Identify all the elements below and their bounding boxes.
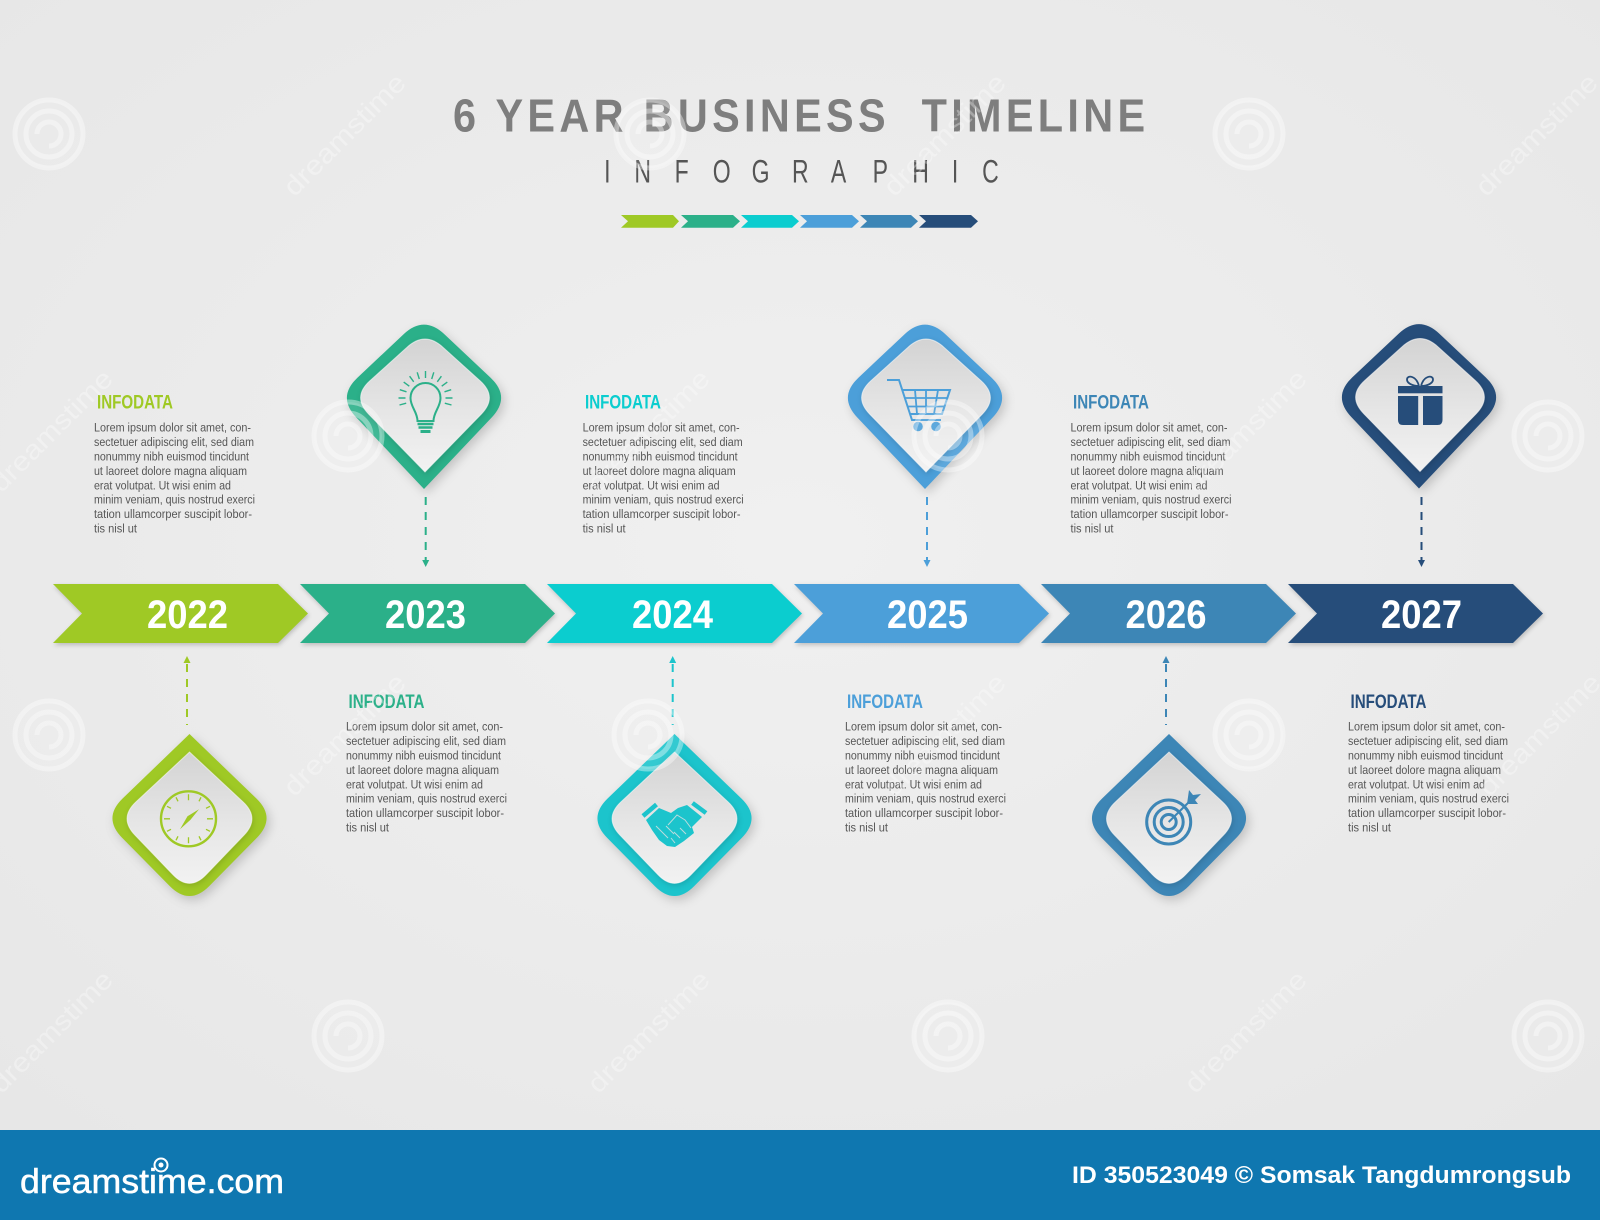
heading 2027: INFODATA bbox=[1350, 692, 1427, 713]
body 2027: sectetuer adipiscing elit, sed diam bbox=[1348, 734, 1508, 748]
body 2027: tation ullamcorper suscipit lobor- bbox=[1348, 806, 1506, 820]
subtitle: INFOGRAPHIC bbox=[604, 154, 999, 189]
body 2022: minim veniam, quis nostrud exerci bbox=[94, 493, 255, 507]
icon: light bulb bbox=[398, 371, 452, 432]
heading 2022: INFODATA bbox=[97, 392, 173, 414]
body 2023: ut laoreet dolore magna aliquam bbox=[346, 763, 499, 777]
body 2023 bbox=[346, 720, 507, 834]
body 2025 bbox=[845, 720, 1006, 834]
body 2024: tation ullamcorper suscipit lobor- bbox=[583, 507, 741, 521]
chevron 2023: 2023 bbox=[385, 593, 466, 637]
body 2026: sectetuer adipiscing elit, sed diam bbox=[1070, 435, 1230, 449]
body 2024: Lorem ipsum dolor sit amet, con- bbox=[583, 421, 740, 435]
footer credit: ID 350523049 © Somsak Tangdumrongsub bbox=[1072, 1162, 1571, 1189]
body 2022: nonummy nibh euismod tincidunt bbox=[94, 450, 249, 464]
text block 2022 bbox=[94, 392, 255, 536]
body 2024: ut laoreet dolore magna aliquam bbox=[583, 464, 736, 478]
chevron 2026: 2026 bbox=[1126, 593, 1206, 637]
icon: gift box bbox=[1398, 377, 1442, 425]
arrow 2024 bbox=[669, 656, 676, 725]
body 2025: sectetuer adipiscing elit, sed diam bbox=[845, 734, 1005, 748]
chevron 2027 bbox=[1288, 584, 1543, 643]
body 2024: erat volutpat. Ut wisi enim ad bbox=[583, 478, 720, 492]
body 2025: minim veniam, quis nostrud exerci bbox=[845, 792, 1006, 806]
body 2026: Lorem ipsum dolor sit amet, con- bbox=[1070, 421, 1228, 435]
diamond 2024 with handshake bbox=[597, 734, 752, 896]
body 2025: nonummy nibh euismod tincidunt bbox=[845, 749, 1000, 763]
chevron 2024: 2024 bbox=[632, 593, 714, 637]
body 2023: minim veniam, quis nostrud exerci bbox=[346, 792, 507, 806]
diamond 2025 with cart bbox=[848, 325, 1002, 489]
title: 6 YEAR BUSINESS TIMELINE bbox=[453, 91, 1145, 142]
body 2024: minim veniam, quis nostrud exerci bbox=[583, 493, 744, 507]
body 2024: nonummy nibh euismod tincidunt bbox=[583, 450, 738, 464]
diamond 2027 with gift bbox=[1342, 324, 1496, 488]
body 2022: Lorem ipsum dolor sit amet, con- bbox=[94, 421, 251, 435]
watermarks: dreamstime bbox=[581, 363, 716, 498]
body 2023: erat volutpat. Ut wisi enim ad bbox=[346, 777, 483, 791]
watermarks: dreamstime bbox=[1178, 363, 1313, 498]
icon: compass bbox=[161, 791, 216, 846]
watermarks: dreamstime bbox=[277, 67, 412, 202]
body 2023: nonummy nibh euismod tincidunt bbox=[346, 749, 501, 763]
watermarks: dreamstime bbox=[277, 667, 412, 802]
body 2027: erat volutpat. Ut wisi enim ad bbox=[1348, 777, 1485, 791]
title arrow strip bbox=[621, 215, 978, 228]
arrow 2026 bbox=[1162, 656, 1170, 725]
body 2023: Lorem ipsum dolor sit amet, con- bbox=[346, 720, 503, 734]
chevron 2025 bbox=[794, 584, 1049, 643]
body 2023: sectetuer adipiscing elit, sed diam bbox=[346, 734, 506, 748]
body 2027: Lorem ipsum dolor sit amet, con- bbox=[1348, 720, 1505, 734]
chevron 2024 bbox=[547, 584, 802, 643]
body 2022: tis nisl ut bbox=[94, 522, 137, 536]
body 2026: nonummy nibh euismod tincidunt bbox=[1070, 450, 1226, 464]
chevron 2023 bbox=[300, 584, 555, 643]
heading 2024: INFODATA bbox=[585, 392, 661, 414]
watermarks: dreamstime bbox=[877, 67, 1012, 202]
heading 2025: INFODATA bbox=[847, 692, 923, 713]
body 2025: Lorem ipsum dolor sit amet, con- bbox=[845, 720, 1002, 734]
timeline ribbon bbox=[53, 584, 1543, 643]
chevron 2026 bbox=[1041, 584, 1296, 643]
heading 2026: INFODATA bbox=[1073, 392, 1149, 414]
icon: handshake bbox=[643, 803, 706, 847]
heading 2023: INFODATA bbox=[348, 692, 425, 713]
body 2027: ut laoreet dolore magna aliquam bbox=[1348, 763, 1501, 777]
body 2024 bbox=[583, 421, 744, 536]
icon: target bbox=[1147, 790, 1201, 844]
text block 2025 bbox=[845, 692, 1006, 834]
text block 2024 bbox=[583, 392, 744, 536]
body 2026: minim veniam, quis nostrud exerci bbox=[1070, 493, 1232, 507]
body 2025: ut laoreet dolore magna aliquam bbox=[845, 763, 998, 777]
diamond 2023 with bulb bbox=[347, 325, 501, 489]
body 2023: tis nisl ut bbox=[346, 821, 389, 835]
body 2027: tis nisl ut bbox=[1348, 821, 1391, 835]
body 2025: tation ullamcorper suscipit lobor- bbox=[845, 806, 1003, 820]
body 2027: nonummy nibh euismod tincidunt bbox=[1348, 749, 1503, 763]
body 2022: sectetuer adipiscing elit, sed diam bbox=[94, 435, 254, 449]
body 2024: sectetuer adipiscing elit, sed diam bbox=[583, 435, 743, 449]
body 2022 bbox=[94, 421, 255, 536]
body 2022: erat volutpat. Ut wisi enim ad bbox=[94, 478, 231, 492]
watermarks: dreamstime bbox=[1178, 964, 1313, 1099]
footer banner bbox=[0, 1130, 1600, 1220]
body 2022: ut laoreet dolore magna aliquam bbox=[94, 464, 247, 478]
arrow 2027 bbox=[1418, 497, 1425, 567]
body 2024: tis nisl ut bbox=[583, 522, 626, 536]
diamond 2022 with compass bbox=[112, 734, 267, 896]
watermarks: dreamstime bbox=[1472, 667, 1600, 802]
body 2026: ut laoreet dolore magna aliquam bbox=[1070, 464, 1224, 478]
body 2026: tis nisl ut bbox=[1070, 522, 1114, 536]
text block 2027 bbox=[1348, 692, 1509, 834]
body 2027 bbox=[1348, 720, 1509, 834]
arrow 2023 bbox=[422, 497, 429, 567]
body 2022: tation ullamcorper suscipit lobor- bbox=[94, 507, 252, 521]
arrow 2022 bbox=[184, 656, 190, 725]
body 2025: erat volutpat. Ut wisi enim ad bbox=[845, 777, 982, 791]
arrow 2025 bbox=[924, 497, 930, 567]
watermarks: dreamstime bbox=[581, 964, 716, 1099]
icon: shopping cart bbox=[887, 380, 950, 430]
body 2026 bbox=[1070, 421, 1232, 536]
body 2023: tation ullamcorper suscipit lobor- bbox=[346, 806, 504, 820]
chevron 2022 bbox=[53, 584, 308, 643]
watermarks: dreamstime bbox=[877, 667, 1012, 802]
chevron 2027: 2027 bbox=[1381, 593, 1462, 637]
chevron 2022: 2022 bbox=[147, 593, 228, 637]
body 2027: minim veniam, quis nostrud exerci bbox=[1348, 792, 1509, 806]
footer logo: dreamstime.com bbox=[20, 1163, 284, 1201]
diamond 2026 with target bbox=[1092, 734, 1246, 896]
text block 2023 bbox=[346, 692, 507, 834]
chevron 2025: 2025 bbox=[887, 593, 968, 637]
watermarks: dreamstime bbox=[1469, 67, 1600, 202]
body 2026: tation ullamcorper suscipit lobor- bbox=[1070, 507, 1228, 521]
body 2025: tis nisl ut bbox=[845, 821, 888, 835]
body 2026: erat volutpat. Ut wisi enim ad bbox=[1070, 478, 1208, 492]
text block 2026 bbox=[1070, 392, 1232, 536]
